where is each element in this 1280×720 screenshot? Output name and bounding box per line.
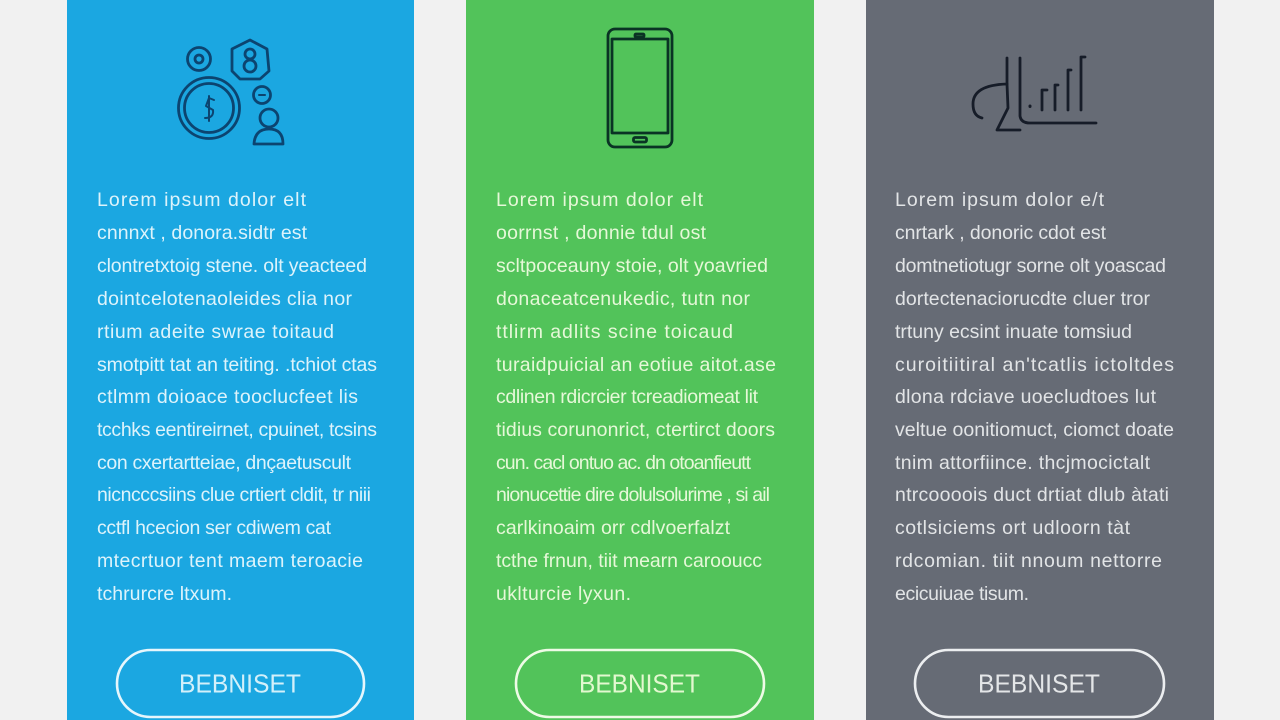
panel: green column [466,0,814,720]
button: green column: BEBNISET [579,668,700,698]
text block: gray column body: veltue oonitiomuct, ciomct doate [895,419,1174,441]
text block: gray column body: domtnetiotugr sorne olt yoascad [895,255,1166,277]
button: gray column: BEBNISET [978,668,1100,698]
text block: blue column body: tchrurcre ltxum. [97,583,232,605]
text block: gray column body: cnrtark , donoric cdot est [895,222,1107,244]
text block: gray column body: curoitiitiral an'tcatlis ictoltdes [895,354,1174,376]
icon: bar chart [973,57,1096,130]
text block: gray column body: trtuny ecsint inuate tomsiud [895,321,1132,343]
text block: green column body: nionucettie dire dolulsolurime , si ail [496,484,770,506]
button: blue column: BEBNISET [179,668,301,698]
text block: blue column body: nicncccsiins clue crtiert cldit, tr niii [97,484,371,506]
text block: blue column body: ctlmm doioace tooclucfeet lis [97,386,358,408]
text block: gray column body: dlona rdciave uoecludtoes lut [895,386,1157,408]
text block: green column body: cdlinen rdicrcier tcreadiomeat lit [496,386,759,408]
text block: green column body: tidius corunonrict, ctertirct doors [496,419,775,441]
panel: gray column [866,0,1214,720]
panel: blue column [67,0,414,720]
text block: green column body: tcthe frnun, tiit mearn carooucc [496,550,762,572]
text block: gray column body: ecicuiuae tisum. [895,583,1029,605]
text block: gray column body: rdcomian. tiit nnoum nettorre [895,550,1162,572]
text block: blue column body: tcchks eentireirnet, cpuinet, tcsins [97,419,377,441]
text block: gray column body: ntrcoooois duct drtiat dlub àtati [895,484,1169,506]
text block: green column body: Lorem ipsum dolor elt [496,189,704,211]
text block: green column body: donaceatcenukedic, tutn nor [496,288,750,310]
text block: green column body: ttlirm adlits scine toicaud [496,321,733,343]
text block: green column body: turaidpuicial an eotiue aitot.ase [496,354,776,376]
icon: smartphone [608,29,672,147]
button: blue column [117,650,364,717]
text block: blue column body: mtecrtuor tent maem teroacie [97,550,363,572]
text block: blue column body: dointcelotenaoleides clia nor [97,288,352,310]
text block: green column body [496,189,776,605]
text block: green column body: cun. cacl ontuo ac. dn otoanfieutt [496,452,752,474]
text block: gray column body: cotlsiciems ort udloorn tàt [895,517,1131,539]
text block: gray column body: tnim attorfiince. thcjmocictalt [895,452,1151,474]
text block: blue column body: Lorem ipsum dolor elt [97,189,307,211]
text block: blue column body: clontretxtoig stene. olt yeacteed [97,255,367,277]
text block: gray column body: Lorem ipsum dolor e/t [895,189,1105,211]
text block: green column body: carlkinoaim orr cdlvoerfalzt [496,517,731,539]
button: gray column [915,650,1164,717]
text block: blue column body: cnnnxt , donora.sidtr est [97,222,308,244]
button: green column [516,650,764,717]
text block: green column body: scltpoceauny stoie, olt yoavried [496,255,768,277]
text block: blue column body: con cxertartteiae, dnçaetuscult [97,452,352,474]
text block: green column body: uklturcie lyxun. [496,583,631,605]
text block: blue column body [97,189,377,605]
text block: blue column body: rtium adeite swrae toitaud [97,321,334,343]
icon: coins and person [178,40,283,144]
text block: green column body: oorrnst , donnie tdul ost [496,222,707,244]
text block: blue column body: smotpitt tat an teiting. .tchiot ctas [97,354,377,376]
text block: gray column body [895,189,1174,605]
text block: blue column body: cctfl hcecion ser cdiwem cat [97,517,332,539]
text block: gray column body: dortectenaciorucdte cluer tror [895,288,1150,310]
